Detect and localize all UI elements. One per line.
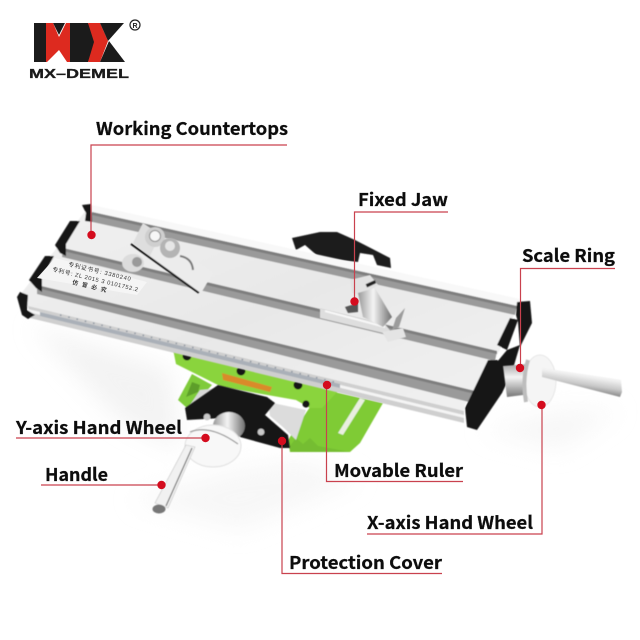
callout: Movable Ruler: Movable Ruler [334,458,463,483]
right end caps [465,301,532,430]
silver slide under the carriage [188,388,220,408]
callout: Y-axis Hand Wheel: Y-axis Hand Wheel [15,415,183,440]
back edge highlight [92,205,520,306]
logo wordmark: MX–DEMEL [29,67,130,81]
table surface [20,205,520,412]
callout: Working Countertops: Working Countertops [96,116,288,141]
logo: MX-DEMEL [29,20,140,81]
slot 2 [62,248,497,361]
callout: Scale Ring [516,243,616,372]
callout: Handle: Handle [45,462,108,487]
front ruler rail [28,306,464,423]
callout: Protection Cover [278,437,442,575]
callout: X-axis Hand Wheel: X-axis Hand Wheel [367,510,534,535]
black rear wedge [292,232,391,268]
callout: Fixed Jaw: Fixed Jaw [358,187,448,212]
green base and carriage [173,349,383,452]
patent sticker: 仿冒必究 [72,278,108,294]
left leg [178,374,212,408]
slot 1 [88,212,517,315]
callout: Scale Ring: Scale Ring [522,243,616,268]
silver gap [268,402,306,440]
callout: Handle [41,462,166,489]
base plate [288,388,383,452]
table: working countertop [17,204,532,430]
patent sticker: 专利号: ZL 2015 3 0101752.2 [52,265,139,293]
logo mark: MX: R [132,23,138,30]
patent sticker: 专利证书号: 3380240 [68,260,132,283]
callout: Movable Ruler [323,381,463,483]
orange nameplate [222,373,272,392]
soft background shadow [30,325,620,530]
base slot [338,398,365,435]
left end caps [17,204,92,319]
Y-axis hand wheel and handle [152,385,290,514]
bolts [182,352,310,408]
disc [185,425,241,467]
callout: Working Countertops [87,116,288,239]
patent sticker [37,258,147,295]
handle [155,445,195,508]
hub [213,412,245,440]
slot 3 [37,285,475,403]
top strip [173,349,340,408]
right clamp [320,275,406,342]
X-axis hand wheel and handle [503,355,622,407]
black protection cover [185,385,290,448]
left clamp [122,223,213,295]
callout: X-axis Hand Wheel [367,401,546,535]
callout: Fixed Jaw [350,187,448,306]
callout: Protection Cover: Protection Cover [289,550,442,575]
